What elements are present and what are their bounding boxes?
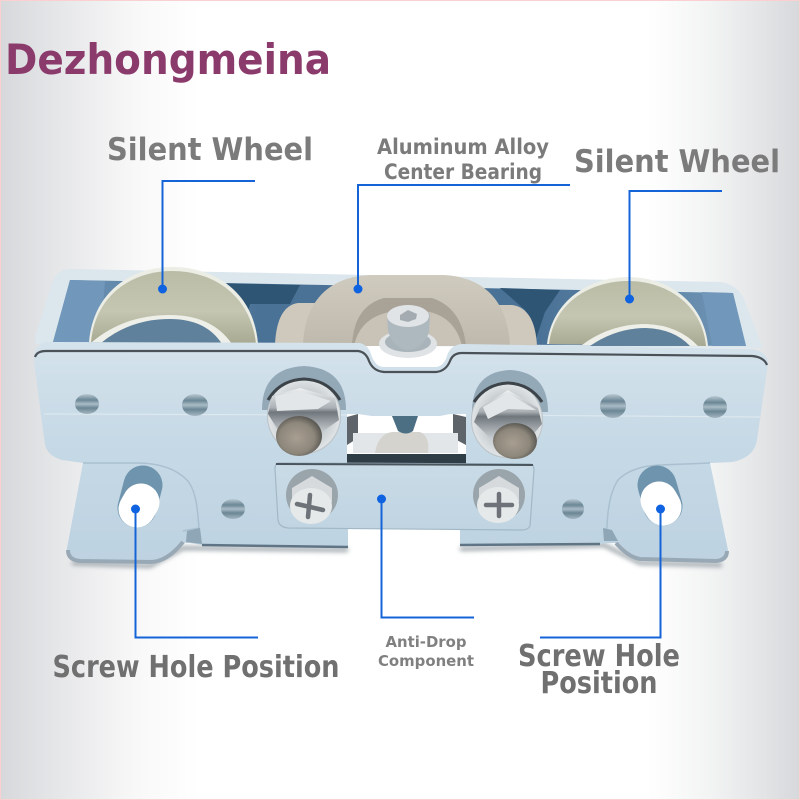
plate edge over left tab xyxy=(83,463,199,531)
label: aluminum alloy center bearing: Center Bearing xyxy=(384,160,542,184)
center hex screw xyxy=(379,305,437,358)
label: screw hole position right xyxy=(518,639,680,701)
label: silent wheel left: Silent Wheel xyxy=(107,132,313,168)
leader: center bearing xyxy=(354,185,570,294)
leader: left silent wheel xyxy=(158,181,255,294)
step shadow left xyxy=(186,528,202,544)
left slot xyxy=(137,485,143,509)
aluminum alloy center bearing xyxy=(275,275,537,346)
rim shadow line xyxy=(35,351,767,372)
product photo: roller assembly xyxy=(34,267,768,566)
leader: left screw hole xyxy=(131,504,258,638)
title: Dezhongmeina xyxy=(5,35,331,84)
left phillips screw xyxy=(286,469,338,524)
right silent wheel xyxy=(547,277,708,346)
left hex bolt xyxy=(262,366,346,456)
leader: anti-drop component xyxy=(377,494,474,618)
label: anti-drop component xyxy=(378,633,475,670)
threaded studs xyxy=(75,394,727,519)
plate edge over right tab xyxy=(604,463,710,537)
leader: right screw hole xyxy=(540,504,665,638)
leader: right silent wheel xyxy=(625,191,722,304)
label: anti-drop component: Anti-Drop xyxy=(386,633,466,651)
label: screw hole position right: Screw Hole xyxy=(518,639,680,674)
step shadow right xyxy=(603,528,618,541)
main front plate xyxy=(34,342,768,563)
label: screw hole position right: Position xyxy=(540,666,658,701)
left silent wheel xyxy=(89,267,258,344)
right slot xyxy=(657,485,663,507)
lower lip of right tab xyxy=(616,543,727,561)
lower edge of plate xyxy=(202,544,600,547)
label: screw hole position left: Screw Hole Position xyxy=(52,650,340,685)
center window with nylon block xyxy=(347,414,466,464)
label: anti-drop component: Component xyxy=(378,652,475,670)
soft ground shadow xyxy=(72,545,722,566)
back channel of the housing xyxy=(35,269,763,348)
label: silent wheel right: Silent Wheel xyxy=(574,144,780,180)
plate crease xyxy=(44,414,760,417)
label: aluminum alloy center bearing xyxy=(377,135,549,184)
right phillips screw xyxy=(473,469,525,523)
lower lip of left tab xyxy=(68,542,183,562)
anti-drop plate xyxy=(275,463,534,530)
label: aluminum alloy center bearing: Aluminum Alloy xyxy=(377,135,549,159)
right hex bolt xyxy=(471,370,548,459)
